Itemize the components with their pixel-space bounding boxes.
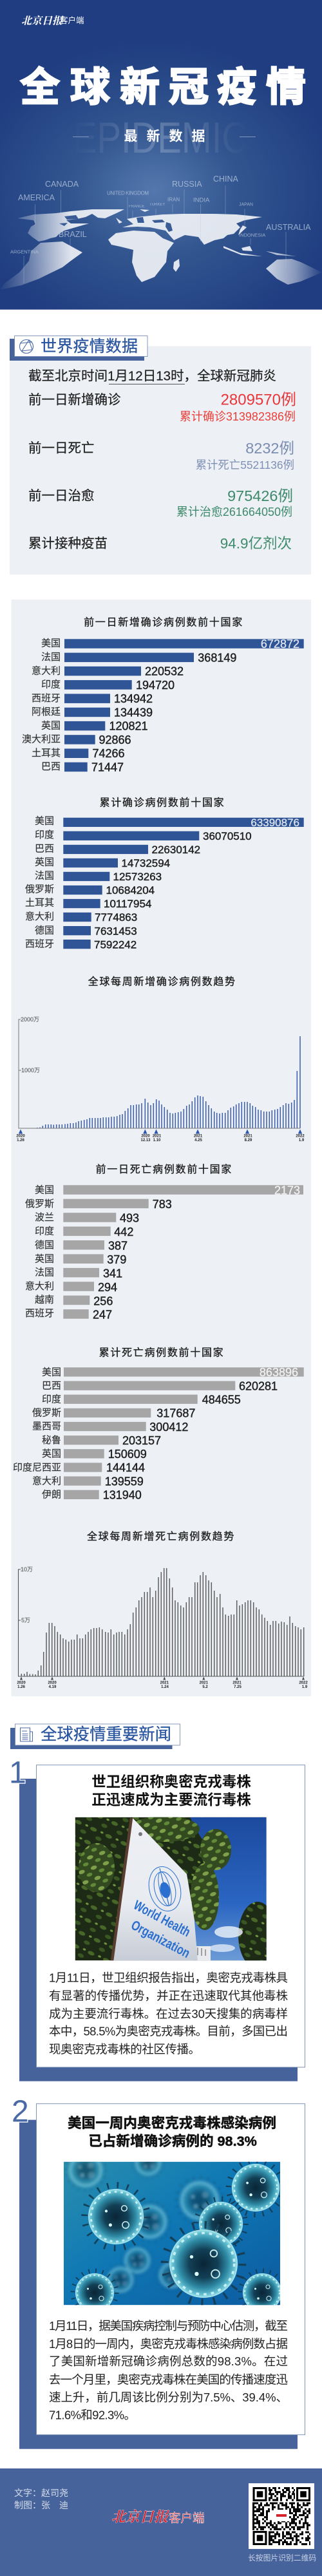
bar chart: cumulative deaths: 巴西	[42, 1381, 61, 1391]
body text 1: 现奥密克戎毒株的社区传播。	[49, 2043, 200, 2056]
photo: virus particles	[64, 2161, 280, 2306]
date markers: 2020	[16, 1135, 25, 1139]
date markers: 4.25	[194, 1139, 202, 1142]
bar chart: new confirmed: 92866	[99, 734, 131, 746]
bar chart: new confirmed	[22, 638, 304, 773]
bar chart: new confirmed: 134942	[114, 692, 153, 705]
bar chart: new confirmed: 71447	[91, 761, 124, 773]
world map: FRANCE	[129, 205, 145, 209]
headline 2	[68, 2115, 276, 2149]
body text 1: 成为主要流行毒株。在过去30天搜集的病毒样	[49, 2007, 288, 2021]
stat: vaccines	[28, 536, 292, 551]
date markers: 2021	[232, 1681, 242, 1685]
world map: IRAN	[167, 197, 180, 202]
bar chart: cumulative deaths: 秘鲁	[42, 1435, 61, 1446]
date markers: 1.24	[161, 1685, 169, 1689]
heading: weekly new deaths trend: 全球每周新增死亡病例数趋势	[87, 1531, 235, 1542]
stat: new confirmed: 2809570例	[221, 392, 296, 408]
bar chart: new confirmed: 368149	[198, 651, 236, 664]
bar chart: cumulative confirmed: 14732594	[121, 857, 170, 869]
heading: key news: 全球疫情重要新闻	[41, 1726, 171, 1744]
world map: BRAZIL	[59, 230, 87, 239]
bar chart: new confirmed: 法国	[41, 652, 61, 663]
title: 疫	[217, 66, 257, 109]
bar chart: new confirmed: 134439	[114, 706, 153, 719]
bar chart: cumulative deaths: 203157	[122, 1434, 161, 1447]
bar chart: cumulative confirmed: 10117954	[104, 898, 151, 910]
bar chart: new deaths: 379	[107, 1253, 126, 1266]
stat: deaths	[28, 440, 294, 471]
WHO emblem	[148, 1866, 182, 1911]
chart: weekly new deaths trend	[17, 1566, 308, 1689]
bar chart: new confirmed: 土耳其	[32, 748, 61, 759]
bar chart: new deaths	[25, 1184, 303, 1321]
bar chart: cumulative confirmed: 10684204	[106, 884, 155, 896]
bar chart: new deaths: 783	[153, 1198, 172, 1211]
date markers: 2020	[17, 1681, 26, 1685]
bar chart: cumulative confirmed: 法国	[35, 871, 54, 881]
bar chart: cumulative confirmed: 俄罗斯	[25, 884, 54, 895]
body text 1: 有显著的传播优势，并正在迅速取代其他毒株	[49, 1989, 288, 2003]
panel: news item 1	[9, 1756, 305, 2081]
headline 2: 已占新增确诊病例的 98.3%	[88, 2133, 257, 2149]
bar chart: cumulative confirmed: 7631453	[94, 925, 137, 937]
bar chart: cumulative confirmed: 7592242	[94, 938, 137, 951]
date markers: 7.25	[234, 1685, 242, 1689]
body text 2: 速上升，前几周该比例分别为7.5%、39.4%、	[49, 2391, 288, 2404]
body text 2: 去一个月里，奥密克戎毒株在美国的传播速度迅	[49, 2372, 288, 2387]
date markers: 2022	[296, 1135, 305, 1139]
number 2: 2	[12, 2094, 29, 2129]
headline 1: 世卫组织称奥密克戎毒株	[91, 1774, 251, 1790]
bar chart: new confirmed: 194720	[136, 679, 175, 692]
bar chart: cumulative confirmed: 63390876	[251, 817, 299, 829]
bar chart: cumulative deaths: 意大利	[32, 1475, 61, 1486]
heading: new confirmed top ten: 前一日新增确诊病例数前十国家	[84, 617, 243, 629]
bar chart: new confirmed: 阿根廷	[32, 706, 61, 717]
bar chart: new confirmed: 英国	[41, 719, 61, 731]
stat: deaths: 前一日死亡	[28, 440, 94, 456]
bar chart: cumulative deaths: 131940	[103, 1489, 142, 1502]
bar chart: cumulative deaths: 美国	[42, 1367, 61, 1378]
world map: INDONESIA	[239, 232, 265, 238]
bar chart: new confirmed: 意大利	[32, 665, 61, 676]
bar chart: cumulative confirmed: 西班牙	[25, 939, 54, 949]
chart: weekly new deaths trend: 10万	[21, 1566, 33, 1573]
title: 球	[70, 66, 110, 109]
stat: recovered	[28, 488, 293, 518]
title: 新	[120, 66, 160, 109]
bar chart: cumulative confirmed: 印度	[35, 829, 54, 840]
headline 1	[91, 1774, 251, 1808]
bar chart: cumulative deaths: 俄罗斯	[32, 1408, 61, 1418]
heading: cumulative confirmed top ten: 累计确诊病例数前十国家	[100, 797, 225, 809]
bar chart: cumulative deaths: 印度	[42, 1394, 61, 1405]
world map: JAPAN	[239, 202, 253, 207]
bar chart: cumulative confirmed: 12573263	[113, 871, 162, 883]
heading: world data: 世界疫情数据	[41, 337, 138, 355]
bar chart: new deaths: 493	[120, 1212, 139, 1225]
panel: news item 2	[12, 2094, 305, 2449]
bar chart: new deaths: 波兰	[35, 1212, 54, 1223]
bar chart: cumulative confirmed: 7774863	[95, 911, 137, 923]
bar chart: cumulative confirmed: 意大利	[25, 911, 54, 922]
logo: red Beijing Daily	[111, 2506, 205, 2526]
body text 2: 1月8日的一周内，奥密克戎毒株感染病例数占据	[49, 2337, 288, 2351]
stat: vaccines: 94.9亿剂次	[220, 536, 292, 551]
bar chart: new deaths: 越南	[35, 1294, 54, 1305]
date markers: 1.26	[17, 1139, 24, 1142]
date markers: 2020	[48, 1681, 57, 1685]
headline 2: 美国一周内奥密克戎毒株感染病例	[68, 2115, 276, 2131]
bar chart: cumulative confirmed: 22630142	[152, 844, 200, 856]
date markers: 1.9	[302, 1685, 308, 1689]
QR code	[249, 2483, 314, 2549]
body text 1	[49, 1971, 288, 2056]
logo: red Beijing Daily: 客户端	[169, 2512, 205, 2524]
body text 2: 71.6%和92.3%。	[49, 2409, 136, 2421]
bar chart: new confirmed: 220532	[145, 665, 184, 677]
date markers	[17, 1677, 308, 1689]
bar chart: cumulative deaths: 英国	[42, 1448, 61, 1459]
stat: recovered: 975426例	[227, 488, 293, 504]
bar chart: cumulative deaths: 620281	[239, 1379, 278, 1392]
credits: 文字：赵司尧	[14, 2488, 68, 2498]
watermark: EPIDEMIC: EPIDEMIC	[73, 113, 248, 162]
date markers: 8.29	[245, 1139, 252, 1142]
chart: weekly new confirmed trend	[16, 1016, 305, 1142]
date markers: 2020	[141, 1135, 150, 1139]
bar chart: new confirmed: 西班牙	[32, 693, 61, 704]
bar chart: new deaths: 英国	[35, 1253, 54, 1265]
date markers: 2021	[194, 1135, 203, 1139]
bar chart: cumulative deaths: 144144	[106, 1461, 145, 1474]
stat: recovered: 累计治愈261664050例	[176, 506, 292, 518]
bar chart: new deaths: 西班牙	[25, 1308, 54, 1319]
bar chart: cumulative deaths: 139559	[105, 1475, 144, 1488]
map labels: CANADA	[45, 180, 79, 189]
date markers: 2021	[153, 1135, 162, 1139]
panel: header banner	[0, 0, 322, 310]
date markers: 2021	[243, 1135, 252, 1139]
bar chart: new confirmed: 672872	[261, 638, 299, 650]
bar chart: new deaths: 意大利	[25, 1280, 54, 1292]
panel: world data card	[10, 336, 311, 574]
subtitle: 据	[192, 129, 205, 144]
world map: TURKEY	[149, 203, 165, 207]
bar chart: new deaths: 2173	[274, 1184, 300, 1197]
bar chart: new deaths: 442	[114, 1226, 133, 1238]
text: time statement: 截至北京时间1月12日13时，全球新冠肺炎	[28, 368, 276, 384]
date markers: 2022	[299, 1681, 308, 1685]
map: inland seas	[59, 215, 173, 232]
caption: scan hint: 长按图片识别二维码	[248, 2553, 316, 2562]
bar chart: cumulative confirmed: 36070510	[203, 830, 252, 842]
logo: Beijing Daily client: 客户端	[60, 15, 84, 25]
bar chart: new confirmed: 120821	[109, 720, 148, 733]
body text 2: 1月11日，据美国疾病控制与预防中心估测，截至	[49, 2319, 288, 2333]
world map: AUSTRALIA	[266, 223, 311, 232]
bar chart: new confirmed: 74266	[93, 747, 125, 760]
body text 2: 了美国新增新冠确诊病例总数的98.3%。在过	[49, 2354, 288, 2368]
date markers: 1.26	[17, 1685, 25, 1689]
bar chart: new confirmed: 巴西	[41, 761, 61, 772]
icon: newspaper	[21, 1728, 32, 1741]
number 1: 1	[9, 1756, 26, 1790]
chart: weekly new confirmed trend: 1000万	[21, 1067, 40, 1074]
stat: vaccines: 累计接种疫苗	[28, 536, 108, 551]
title	[20, 66, 306, 109]
heading: key news	[10, 1724, 180, 1749]
logo: Beijing Daily client	[21, 13, 84, 27]
bar chart: cumulative deaths: 484655	[202, 1394, 241, 1406]
world map: UNITED KINGDOM	[107, 191, 149, 196]
chart: weekly new deaths trend: 5万	[21, 1617, 30, 1624]
title: 情	[266, 66, 306, 109]
bar chart: new deaths: 247	[93, 1309, 112, 1321]
world map	[0, 175, 322, 290]
bar chart: new confirmed: 美国	[41, 638, 61, 649]
photo: WHO sign: World Health	[131, 1898, 193, 1940]
date markers: 5.2	[202, 1685, 208, 1689]
bar chart: new confirmed: 印度	[41, 679, 61, 690]
bar chart: new deaths: 341	[103, 1267, 122, 1280]
subtitle: 新	[147, 129, 160, 144]
stat: new confirmed: 前一日新增确诊	[28, 393, 121, 407]
credits: 制图：张 迪	[14, 2500, 68, 2510]
world map: RUSSIA	[172, 180, 202, 189]
world map: AMERICA	[18, 193, 55, 202]
date markers	[16, 1130, 305, 1142]
bar chart: new deaths: 美国	[35, 1185, 54, 1195]
bar chart: new deaths: 387	[108, 1239, 128, 1252]
body text 1: 1月11日，世卫组织报告指出，奥密克戎毒株具	[49, 1971, 288, 1985]
bar chart: cumulative deaths: 伊朗	[42, 1489, 61, 1501]
date markers: 1.10	[153, 1139, 161, 1142]
body text 2	[49, 2319, 288, 2421]
heading: world data	[10, 336, 147, 361]
subtitle	[73, 129, 256, 144]
bar chart: new deaths: 德国	[35, 1239, 54, 1251]
bar chart: cumulative deaths: 150609	[108, 1448, 147, 1461]
heading: new deaths top ten: 前一日死亡病例数前十国家	[96, 1164, 232, 1175]
bar chart: new deaths: 印度	[35, 1226, 54, 1236]
bar chart: new deaths: 294	[98, 1281, 117, 1294]
icon: globe	[19, 340, 33, 353]
bar chart: cumulative deaths: 墨西哥	[32, 1421, 61, 1432]
photo: WHO sign: Organization	[129, 1918, 193, 1961]
stat: deaths: 累计死亡5521136例	[196, 459, 294, 471]
body text 1: 本中，58.5%为奥密克戎毒株。目前，多国已出	[49, 2025, 288, 2038]
logo: red Beijing Daily: 北京日报	[111, 2506, 170, 2526]
bar chart: cumulative confirmed: 德国	[35, 925, 54, 936]
bar chart: cumulative deaths: 印度尼西亚	[13, 1462, 61, 1473]
date markers: 4.19	[49, 1685, 57, 1689]
world map: CHINA	[213, 175, 239, 184]
subtitle: 数	[169, 129, 183, 144]
photo: WHO sign	[75, 1817, 267, 1960]
chart: weekly new confirmed trend: 2000万	[21, 1016, 39, 1023]
world map: ARGENTINA	[10, 249, 39, 255]
bar chart: new deaths: 俄罗斯	[25, 1198, 54, 1209]
world map: INDIA	[193, 197, 210, 204]
title: 冠	[169, 66, 209, 109]
bar chart: cumulative confirmed: 土耳其	[25, 898, 54, 908]
bar chart: cumulative confirmed: 巴西	[35, 844, 54, 854]
stat: new confirmed	[28, 392, 296, 423]
stat: new confirmed: 累计确诊313982386例	[180, 410, 296, 423]
stat: recovered: 前一日治愈	[28, 488, 94, 504]
bar chart: cumulative deaths	[13, 1366, 304, 1502]
date markers: 1.9	[299, 1139, 305, 1142]
credits	[14, 2488, 68, 2510]
subtitle: 最	[124, 129, 138, 144]
bar chart: cumulative confirmed	[25, 815, 304, 951]
panel: footer	[0, 2468, 322, 2576]
bar chart: cumulative deaths: 863896	[260, 1366, 298, 1379]
stat: deaths: 8232例	[245, 440, 294, 457]
date markers: 2021	[200, 1681, 209, 1685]
bar chart: new deaths: 256	[93, 1294, 113, 1307]
headline 1: 正迅速成为主要流行毒株	[91, 1792, 251, 1808]
logo: Beijing Daily client: 北京日报	[21, 13, 64, 27]
date markers: 2021	[160, 1681, 169, 1685]
bar chart: new deaths: 法国	[35, 1267, 54, 1278]
bar chart: cumulative deaths: 300412	[149, 1421, 188, 1434]
heading: cumulative deaths top ten: 累计死亡病例数前十国家	[99, 1347, 224, 1359]
date markers: 12.13	[140, 1139, 151, 1142]
bar chart: cumulative confirmed: 英国	[35, 857, 54, 868]
title: 全	[20, 66, 60, 109]
bar chart: cumulative confirmed: 美国	[35, 815, 54, 827]
bar chart: cumulative deaths: 317687	[156, 1407, 195, 1420]
heading: weekly new confirmed trend: 全球每周新增确诊病例数趋势	[88, 976, 236, 988]
bar chart: new confirmed: 澳大利亚	[22, 734, 61, 745]
panel: charts	[12, 600, 311, 1696]
